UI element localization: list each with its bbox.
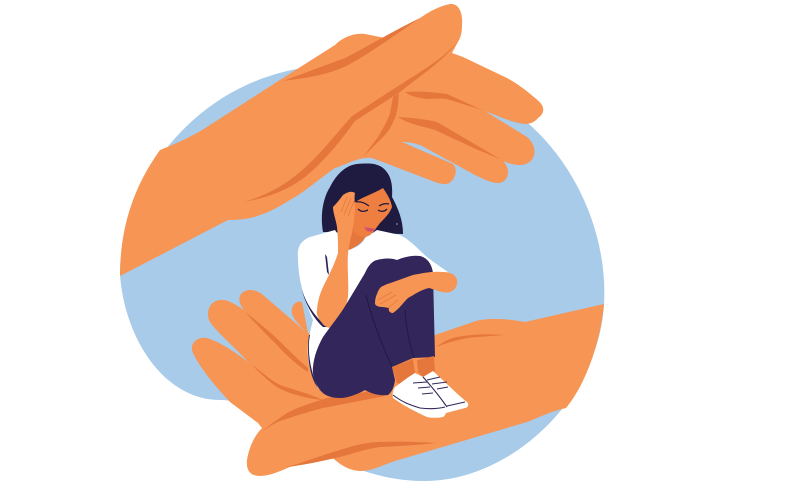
eyes and brows (356, 202, 389, 211)
upper hand creases (244, 18, 500, 202)
lower hand creases (245, 312, 505, 467)
shoe details (393, 377, 465, 409)
neck (345, 229, 366, 250)
pants fold lines (366, 295, 414, 367)
upper hand (120, 4, 543, 276)
face (353, 188, 392, 237)
upper hand shape (120, 4, 543, 276)
lower hand (192, 290, 604, 476)
back shoe (423, 371, 468, 413)
background blue blob (120, 65, 604, 481)
knee hand finger lines (378, 292, 398, 308)
shirt (298, 230, 457, 394)
shoes (393, 371, 468, 418)
arm and hand on head (317, 192, 355, 328)
shirt shadow lines (302, 254, 329, 388)
ankles (392, 356, 435, 385)
lips (364, 227, 376, 232)
front shoe (393, 373, 447, 418)
finger lines (341, 197, 354, 216)
woman (298, 163, 468, 418)
hair (322, 163, 403, 234)
arm and hand on knee (375, 272, 457, 313)
lower hand shape (192, 290, 604, 476)
pants (313, 256, 435, 398)
hair highlight (396, 223, 398, 225)
